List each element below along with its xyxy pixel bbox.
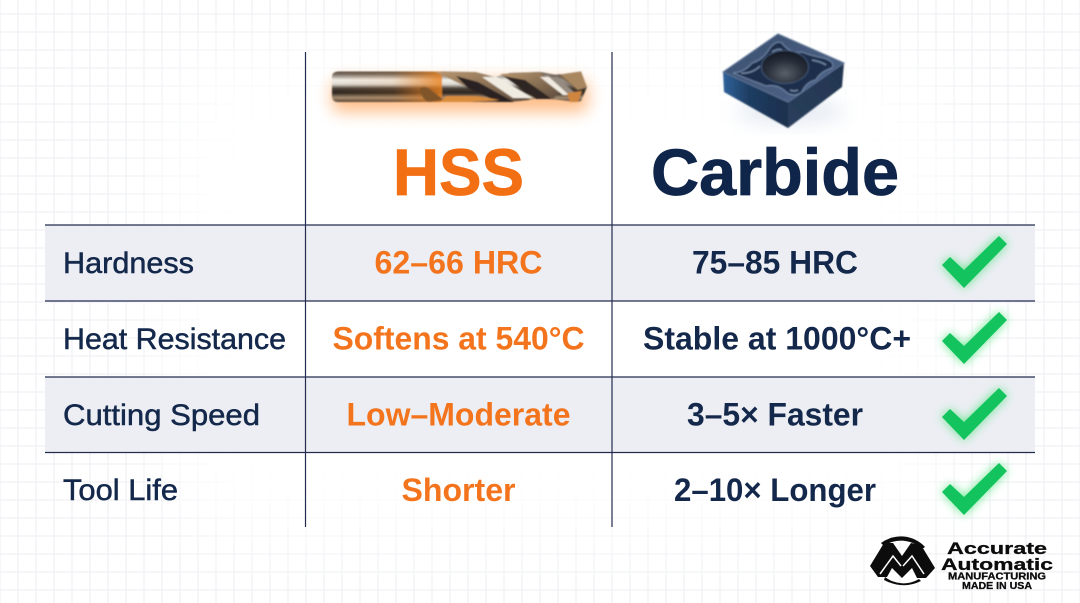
icon: carbide insert: [723, 34, 845, 128]
HSS values: Low–Moderate: [346, 396, 570, 432]
icon: check mark row 3: [942, 388, 1007, 440]
row labels: Heat Resistance: [63, 323, 286, 356]
icon: check mark row 2: [942, 312, 1007, 364]
logo text: [941, 539, 1053, 592]
Carbide values: 3–5× Faster: [687, 396, 863, 432]
row labels: [63, 247, 286, 507]
logo text: MADE IN USA: [962, 581, 1032, 592]
Carbide values: Stable at 1000°C+: [643, 320, 911, 356]
logo text: Accurate: [947, 539, 1047, 558]
table rules: [45, 52, 1035, 527]
icon: check mark row 4: [942, 463, 1007, 515]
Carbide values: 75–85 HRC: [692, 244, 858, 280]
logo text: MANUFACTURING: [948, 572, 1046, 582]
logo: Accurate Automatic: [870, 536, 1053, 592]
icon: check mark row 1: [942, 236, 1007, 288]
logo mark: [870, 536, 935, 585]
heading: Carbide: Carbide: [651, 135, 899, 209]
heading: HSS: HSS: [393, 135, 524, 209]
HSS values: Softens at 540°C: [332, 320, 584, 356]
Carbide values: [643, 244, 911, 508]
HSS values: [332, 244, 584, 508]
HSS values: 62–66 HRC: [374, 244, 542, 280]
logo text: Automatic: [941, 555, 1053, 574]
Carbide values: 2–10× Longer: [674, 472, 876, 508]
table rows shading: [45, 225, 1035, 452]
icon: HSS drill bit: [332, 72, 588, 112]
row labels: Cutting Speed: [63, 399, 260, 432]
HSS values: Shorter: [402, 472, 516, 508]
row labels: Tool Life: [63, 474, 178, 507]
row labels: Hardness: [63, 247, 194, 280]
